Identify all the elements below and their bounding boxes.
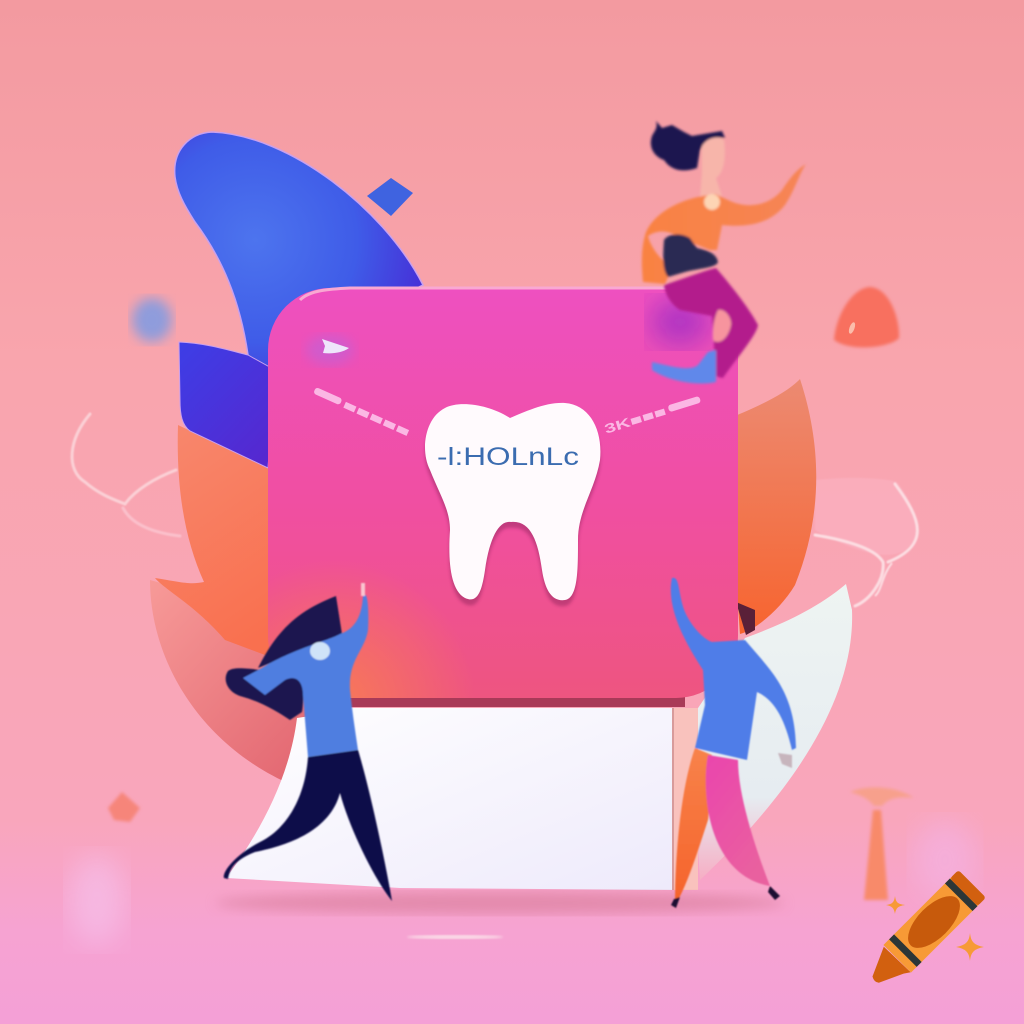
crayon cap [950, 870, 986, 906]
crayon body [883, 877, 979, 973]
label: right dashes: 3K■■■ [603, 403, 668, 437]
decorative tower [850, 787, 914, 900]
blue fin upper [175, 132, 423, 400]
hair [258, 596, 342, 668]
blue fin lower [179, 342, 275, 468]
figure: top person [642, 121, 806, 384]
blue tab [367, 178, 413, 216]
ground shadow [215, 892, 785, 914]
outline decoration: right [815, 478, 917, 606]
figure: left person [224, 583, 392, 901]
tooth label: -l:HOLnLc [437, 443, 579, 471]
front leg [706, 755, 770, 886]
shoe [652, 350, 716, 384]
decorative blue blur [132, 298, 172, 342]
shirt [642, 164, 806, 284]
belt [663, 234, 718, 277]
collar dot [704, 194, 720, 210]
label: right dashes [603, 393, 703, 437]
label: left dashes: ■■■■■ [341, 397, 413, 440]
back leg [675, 748, 712, 905]
panel: white box and drape [226, 708, 698, 890]
dark sleeve [226, 668, 303, 720]
figure: right person [671, 578, 796, 908]
label: left dashes [311, 384, 413, 440]
icon: crayon [861, 870, 986, 995]
torso and arms [671, 578, 796, 760]
pants [664, 268, 758, 378]
shadow of figure on square [650, 298, 710, 346]
panel: main rounded square [268, 288, 738, 698]
collar dot [310, 642, 330, 660]
blurred glow: lower left [69, 855, 125, 945]
torso and arm [243, 594, 368, 757]
tooth icon with label [425, 403, 600, 606]
trousers [224, 750, 392, 901]
icon: play glyph [306, 335, 354, 365]
decorative small salmon shape [108, 792, 140, 822]
leaf: white right [690, 584, 852, 880]
shadow under square [350, 670, 685, 707]
feet [671, 897, 680, 908]
leaf: orange left [155, 425, 300, 668]
sparkle small [886, 896, 905, 914]
leaf: orange right [725, 379, 816, 634]
crayon tip [862, 946, 911, 994]
outline decoration: left [72, 414, 180, 536]
hand [778, 753, 792, 768]
decorative salmon dome [834, 287, 899, 347]
knee highlight [713, 310, 731, 342]
crayon bands [889, 934, 922, 967]
crayon oval [899, 887, 969, 957]
blurred glow: lower right [913, 820, 977, 900]
fingertip [361, 583, 365, 596]
hair [651, 121, 725, 170]
sparkle large [956, 933, 984, 961]
ground highlight [407, 935, 503, 939]
dark notch behind leaf [736, 602, 755, 635]
face and neck [700, 138, 725, 198]
leaf: big salmon left [150, 580, 340, 785]
